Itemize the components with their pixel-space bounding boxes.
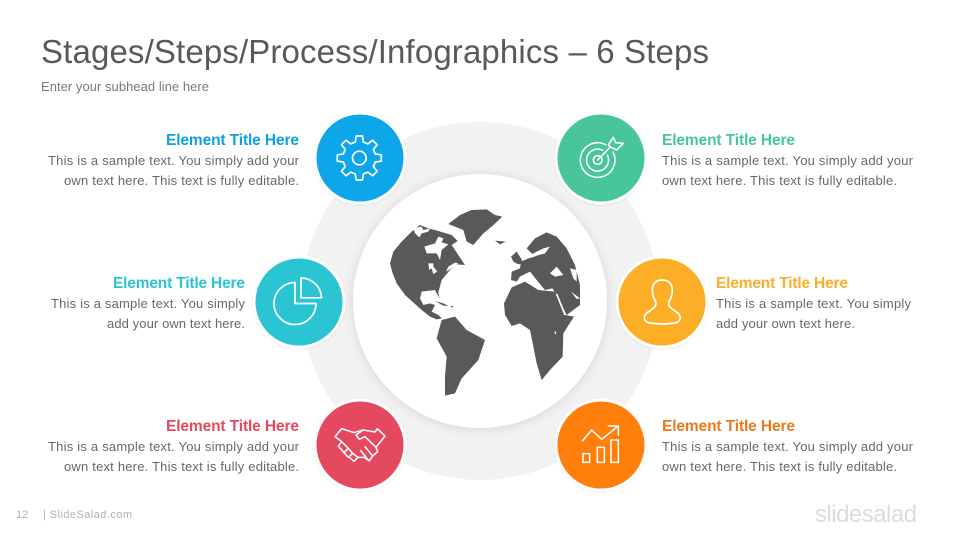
blue circle — [315, 113, 405, 203]
step 1: blue gear — [48, 113, 405, 203]
footer site: | SlideSalad.com — [43, 509, 132, 521]
great lakes — [428, 263, 458, 274]
title: Stages/Steps/Process/Infographics – 6 Steps — [41, 33, 709, 70]
iceland — [495, 241, 506, 244]
outer ring — [301, 122, 659, 480]
icon: pie chart — [274, 278, 322, 324]
page number: 12 — [16, 509, 28, 521]
icon: gear — [337, 136, 381, 180]
icon: target — [580, 137, 623, 177]
body text: This is a sample text. You simply add your — [662, 153, 914, 168]
body text: This is a sample text. You simply add your — [48, 439, 300, 454]
heading: Element Title Here — [662, 132, 795, 149]
body text: This is a sample text. You simply — [51, 296, 246, 311]
subhead: Enter your subhead line here — [41, 79, 209, 94]
step 5: yellow user: add your own text here. — [716, 316, 855, 331]
body text: This is a sample text. You simply add your — [48, 153, 300, 168]
red sea — [557, 294, 565, 315]
step 1: blue gear: own text here. This text is fully editable. — [64, 173, 299, 188]
icon: user — [644, 280, 680, 324]
green circle — [556, 113, 646, 203]
hudson bay — [424, 237, 448, 260]
teal circle — [254, 257, 344, 347]
step 6: orange chart — [556, 400, 914, 490]
britain — [511, 252, 523, 264]
eurasia — [511, 232, 580, 315]
step 3: red handshake — [48, 400, 405, 490]
cuba — [435, 301, 454, 308]
world map — [390, 209, 580, 396]
step 3: red handshake: own text here. This text is fully editable. — [64, 459, 299, 474]
body text: This is a sample text. You simply — [716, 296, 912, 311]
north america — [390, 225, 465, 319]
red circle — [315, 400, 405, 490]
orange circle — [556, 400, 646, 490]
arctic islands — [413, 227, 430, 237]
heading: Element Title Here — [166, 132, 299, 149]
heading: Element Title Here — [716, 275, 848, 292]
logo: slidesalad — [815, 501, 917, 528]
body text: This is a sample text. You simply add your — [662, 439, 914, 454]
inner white circle — [353, 174, 607, 428]
yellow circle — [617, 257, 707, 347]
heading: Element Title Here — [662, 418, 795, 435]
africa — [504, 282, 574, 380]
step 5: yellow user — [617, 257, 912, 347]
heading: Element Title Here — [113, 275, 245, 292]
icon: handshake — [335, 429, 385, 461]
step 6: orange chart: own text here. This text is fully editable. — [662, 459, 897, 474]
step 2: teal pie: add your own text here. — [107, 316, 245, 331]
step 4: green target — [556, 113, 914, 203]
icon: growth chart — [583, 426, 618, 462]
step 2: teal pie — [51, 257, 344, 347]
south america — [437, 317, 485, 396]
inland seas — [530, 247, 580, 335]
greenland — [448, 209, 502, 245]
step 4: green target: own text here. This text is fully editable. — [662, 173, 897, 188]
heading: Element Title Here — [166, 418, 299, 435]
